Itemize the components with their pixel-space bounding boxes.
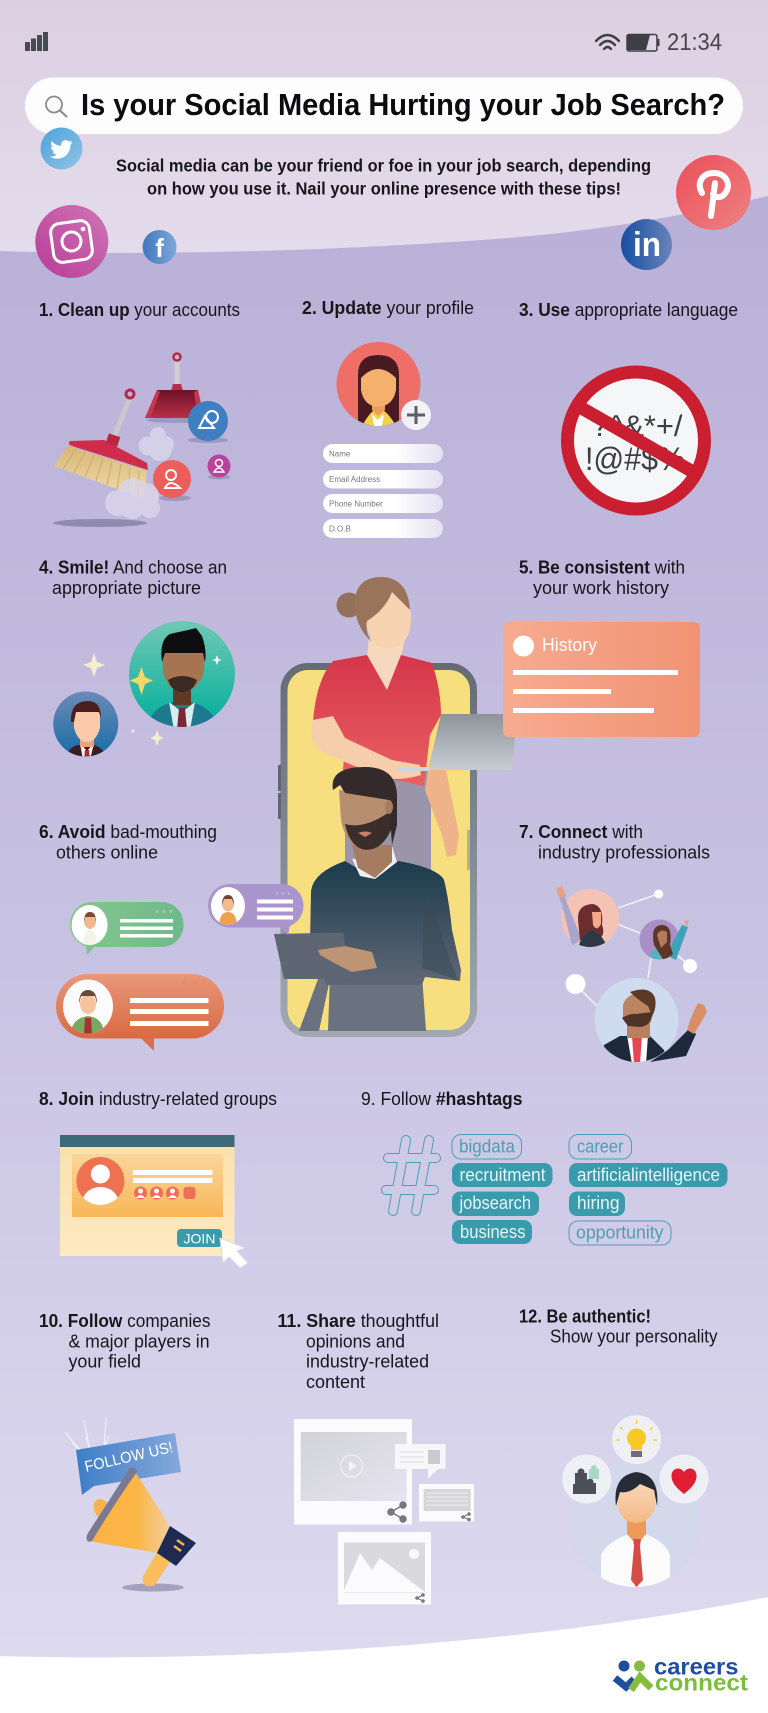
heading 11: 11. Share thoughtful (278, 1311, 439, 1331)
icon: authentic person (562, 1415, 708, 1587)
form fields: D.O.B (329, 524, 351, 534)
group page card (60, 1135, 248, 1268)
search bar pill (25, 78, 743, 134)
video post card (294, 1419, 412, 1524)
panel: tip 5 consistency (503, 558, 700, 737)
heading 8: 8. Join industry-related groups (39, 1089, 277, 1109)
icon: battery (627, 34, 660, 51)
hashtag tags: artificialintelligence (577, 1165, 720, 1185)
heading 12: Show your personality (550, 1326, 718, 1346)
heading 5 (519, 558, 685, 598)
icon: no swearing sign: ?^&*+/ (592, 410, 683, 443)
form fields: Email Address (329, 475, 380, 484)
article post card (419, 1484, 474, 1522)
heading 10 (39, 1311, 210, 1372)
form fields (323, 444, 443, 538)
heading 10: your field (68, 1352, 141, 1372)
panel: tip 6 bad-mouthing (39, 822, 304, 1051)
heading 2: 2. Update your profile (302, 298, 474, 318)
hashtag tags: hiring (577, 1193, 620, 1213)
icon: heart bubble (660, 1454, 708, 1504)
icon: sparkles (83, 653, 222, 746)
hashtag tags: recruitment (460, 1165, 546, 1185)
icon: signal bars (25, 32, 48, 51)
icon: facebook (143, 230, 177, 264)
heading 4: appropriate picture (52, 578, 201, 598)
hashtag tags: opportunity (576, 1222, 664, 1242)
heading 11: content (306, 1372, 365, 1392)
group page card: JOIN (184, 1230, 215, 1246)
heading 9: 9. Follow #hashtags (361, 1089, 522, 1109)
search bar title (25, 78, 743, 134)
heading 4 (39, 558, 227, 598)
panel: tip 10 follow companies (39, 1311, 210, 1592)
join button (177, 1229, 222, 1247)
icon: linkedin (621, 219, 672, 270)
phone (278, 666, 474, 1034)
icon: small avatar (53, 692, 118, 760)
heading 1: 1. Clean up your accounts (39, 300, 240, 320)
heading 10: 10. Follow companies (39, 1311, 210, 1331)
logo: careers connect (615, 1654, 748, 1696)
heading 11 (278, 1311, 439, 1392)
panel: tip 8 groups (39, 1089, 277, 1268)
heading 12: 12. Be authentic! (519, 1306, 651, 1326)
heading 10: & major players in (68, 1332, 210, 1352)
icon: megaphone with banner (65, 1418, 196, 1592)
man hand (318, 946, 377, 972)
tablet (274, 932, 352, 979)
green speech bubble (70, 902, 184, 955)
icon: broom and dustpan (53, 354, 230, 527)
hashtag tags (452, 1134, 728, 1245)
logo wordmark: careers (654, 1654, 738, 1680)
panel: tip 3 language (519, 300, 738, 509)
background: top header area (0, 0, 768, 300)
icon: hash outline (386, 1140, 436, 1211)
icon: megaphone with banner: FOLLOW US! (83, 1439, 175, 1476)
heading 4: 4. Smile! And choose an (39, 558, 227, 578)
intro text (116, 156, 651, 198)
network graphic (556, 886, 707, 1064)
heading 6: others online (56, 842, 158, 862)
icon: instagram (35, 205, 108, 278)
panel: tip 7 connect (519, 822, 710, 1064)
laptop (398, 714, 517, 771)
hashtag tags: career (577, 1136, 624, 1156)
purple speech bubble (208, 884, 304, 935)
orange speech bubble (56, 974, 224, 1051)
woman (311, 577, 459, 880)
panel: tip 2 update profile (302, 298, 474, 538)
panel: tip 4 smile (39, 558, 235, 760)
panel: tip 1 clean up (39, 300, 240, 527)
panel: tip 12 authentic (519, 1306, 718, 1587)
icon: no swearing sign (568, 372, 704, 509)
icon: cursor (220, 1238, 248, 1268)
heading 7: 7. Connect with (519, 822, 643, 842)
heading 5: 5. Be consistent with (519, 558, 685, 578)
icon: twitter (40, 128, 82, 170)
background: white footer wave (0, 1597, 768, 1713)
heading 6: 6. Avoid bad-mouthing (39, 822, 217, 842)
history card: History (542, 635, 597, 655)
logo: careers connect: connect (655, 1670, 748, 1696)
heading 6 (39, 822, 217, 862)
intro text: on how you use it. Nail your online presence with these tips! (147, 178, 621, 198)
icon: puzzle bubble (562, 1454, 611, 1504)
hashtag tags: bigdata (459, 1136, 516, 1156)
intro text: Social media can be your friend or foe in your job search, depending (116, 156, 651, 176)
icon: large avatar (129, 621, 235, 730)
panel: tip 11 share content (278, 1311, 474, 1604)
history card (503, 622, 700, 737)
heading 5: your work history (533, 578, 669, 598)
heading 11: opinions and (306, 1332, 405, 1352)
heading 7 (519, 822, 710, 862)
icon: no swearing sign: !@#$% (585, 441, 685, 477)
heading 3: 3. Use appropriate language (519, 300, 738, 320)
man (299, 767, 461, 1031)
logo symbol (615, 1660, 651, 1690)
comment bubble (395, 1444, 446, 1479)
panel: tip 9 hashtags (361, 1089, 728, 1245)
clock time: 21:34 (667, 29, 722, 56)
form fields: Name (329, 450, 351, 458)
image post card (338, 1532, 431, 1604)
central figure: phone with two people (274, 577, 517, 1034)
icon: linkedin: in (633, 226, 661, 264)
heading 7: industry professionals (538, 842, 710, 862)
heading 11: industry-related (306, 1352, 429, 1372)
icon: facebook: f (155, 233, 164, 263)
icon: wifi (596, 35, 619, 49)
status bar (25, 29, 722, 56)
icon: magnifier (46, 96, 67, 117)
icon: profile avatar (336, 342, 431, 430)
hashtag tags: business (460, 1222, 526, 1242)
icon: light bulb bubble (612, 1415, 661, 1464)
icon: pinterest (676, 155, 751, 230)
title: Is your Social Media Hurting your Job Search? (81, 88, 725, 122)
social icons (35, 128, 751, 278)
form fields: Phone Number (329, 500, 383, 508)
hashtag tags: jobsearch (459, 1193, 531, 1213)
heading 12 (519, 1306, 718, 1346)
